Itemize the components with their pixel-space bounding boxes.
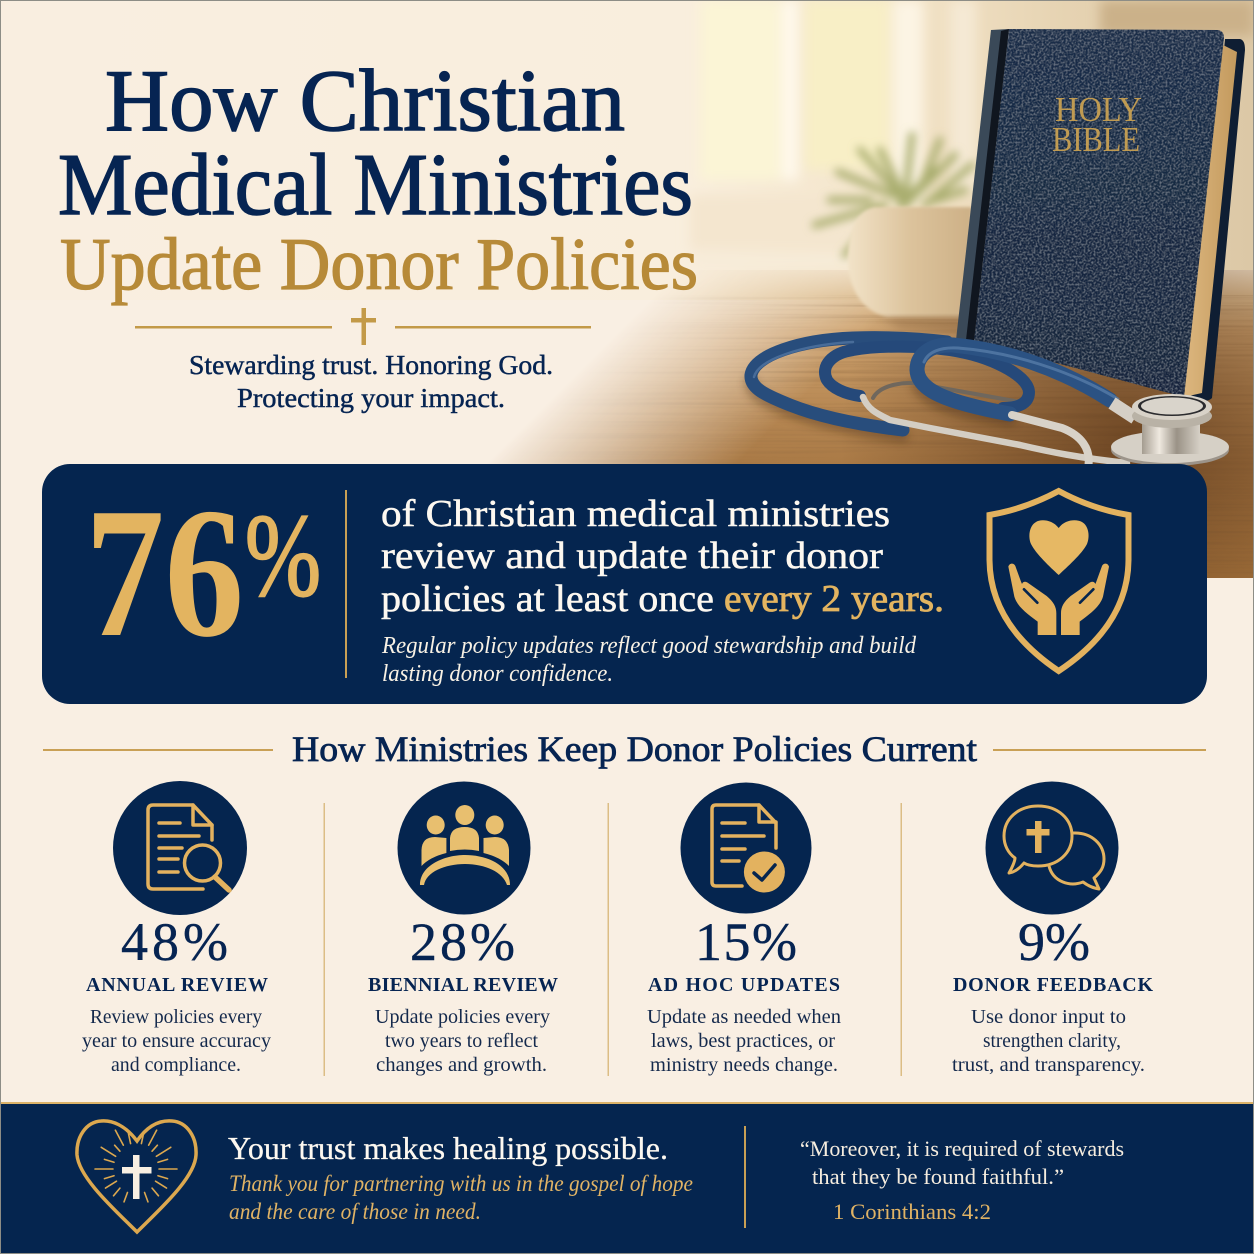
supporting note [381,633,917,687]
description: two years to reflect [385,1030,538,1052]
icon: document with magnifier [113,781,247,915]
panel: footer [0,1102,1254,1254]
photo: bible and stethoscope on table [500,1,1253,578]
statistic statement: of Christian medical ministries [381,493,890,535]
chest piece [1111,394,1229,466]
description: Update policies every [375,1006,550,1028]
statistic statement [381,493,944,620]
statistic statement: policies at least once [381,578,714,620]
panel: biennial review [368,782,558,1076]
stat: 9%: 9% [1018,912,1090,972]
label: ad hoc updates: AD HOC UPDATES [648,974,840,996]
scripture quote [800,1136,1124,1224]
description: changes and growth. [376,1054,547,1076]
HOLY BIBLE lettering [1052,90,1142,159]
wooden table [500,270,1253,578]
icon: speech bubbles with cross [986,782,1118,914]
subtitle [189,350,553,413]
description: Update as needed when [647,1006,841,1028]
window wall [0,0,1254,300]
title: How Christian [105,53,625,150]
section heading: How Ministries Keep Donor Policies Current [292,729,977,769]
ornament: cross divider [135,308,591,345]
HOLY BIBLE lettering: HOLY [1055,90,1142,129]
plant [815,135,985,332]
stat: 48%: 48% [121,912,228,972]
thank you message: Your trust makes healing possible. [228,1130,668,1166]
panel: donor feedback [952,782,1153,1076]
thank you message: and the care of those in need. [229,1199,481,1224]
description [375,1006,550,1076]
spine [956,29,1009,341]
supporting note: Regular policy updates reflect good stewardship and build [381,633,917,659]
title: Update Donor Policies [60,224,698,306]
description: strengthen clarity, [983,1030,1121,1052]
back cover [1190,39,1245,401]
label: biennial review: BIENNIAL REVIEW [368,974,558,996]
description: Review policies every [90,1006,262,1028]
window glow [690,0,1254,268]
description: ministry needs change. [650,1054,838,1076]
panel: 76% statistic banner [42,464,1207,704]
thank you message: Thank you for partnering with us in the gospel of hope [229,1171,693,1196]
panel: annual review [82,781,271,1076]
supporting note: lasting donor confidence. [382,661,613,687]
icon: shield with heart and hands [990,491,1128,671]
icon: document with check mark [680,782,812,914]
label: annual review: ANNUAL REVIEW [86,974,268,996]
HOLY BIBLE lettering: BIBLE [1052,120,1140,159]
big statistic: 76 [85,470,244,676]
description: year to ensure accuracy [82,1030,271,1052]
scripture quote: that they be found faithful.” [812,1164,1064,1189]
thank you message [228,1130,693,1224]
scripture quote: 1 Corinthians 4:2 [833,1199,991,1224]
description: Use donor input to [971,1006,1126,1028]
subtitle: Stewarding trust. Honoring God. [189,350,553,380]
title: Medical Ministries [58,137,693,234]
front cover [974,29,1224,397]
big statistic: % [245,490,321,621]
title [58,53,698,306]
subtitle: Protecting your impact. [237,383,505,413]
description: laws, best practices, or [651,1030,835,1052]
description: trust, and transparency. [952,1054,1145,1076]
statistic statement: review and update their donor [381,535,883,577]
description [647,1006,841,1076]
stethoscope [751,338,1135,468]
scripture quote: “Moreover, it is required of stewards [800,1136,1124,1161]
page edges [1184,45,1237,397]
stat: 28%: 28% [410,912,515,972]
label: donor feedback: DONOR FEEDBACK [953,974,1153,996]
panel: ad hoc updates [647,782,841,1076]
description: and compliance. [111,1054,241,1076]
icon: heart with radiant cross [77,1121,196,1232]
statistic statement: every 2 years. [724,578,944,620]
bible [956,29,1245,401]
description [952,1006,1145,1076]
description [82,1006,271,1076]
stat: 15%: 15% [695,912,797,972]
icon: group of people [398,782,530,914]
